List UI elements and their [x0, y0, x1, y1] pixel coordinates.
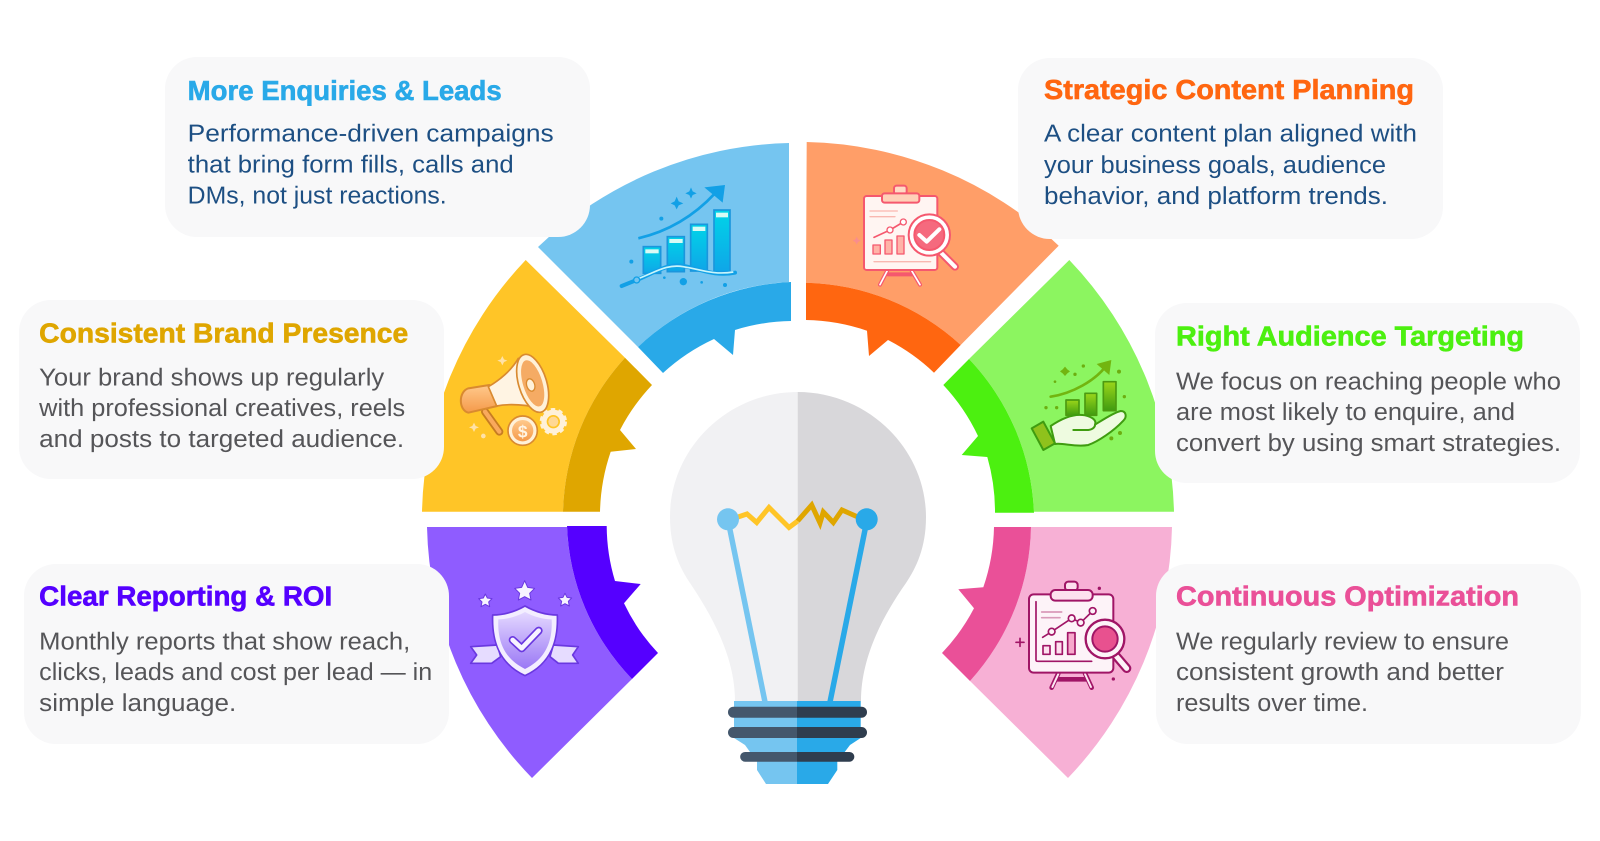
panel: Continuous Optimization [1156, 564, 1581, 744]
base bands [728, 707, 867, 762]
bulb glass [670, 392, 926, 701]
icon: megaphone with coin and gear: $ [518, 422, 528, 441]
body text: convert by using smart strategies. [1176, 430, 1561, 457]
icon: megaphone with coin and gear [461, 351, 565, 445]
body text [1176, 628, 1509, 717]
body text: Your brand shows up regularly [39, 364, 385, 391]
wire contacts [717, 508, 878, 530]
body text [1044, 120, 1417, 210]
heading: Right Audience Targeting [1176, 321, 1524, 352]
body text: Monthly reports that show reach, [39, 628, 410, 655]
body text: simple language. [39, 690, 236, 717]
body text: that bring form fills, calls and [188, 151, 514, 178]
filament [738, 505, 857, 528]
panel: More Enquiries & Leads [165, 57, 590, 237]
panel: Consistent Brand Presence [19, 300, 444, 479]
body text [1176, 368, 1561, 457]
body text: are most likely to enquire, and [1176, 399, 1515, 426]
segment: blue [538, 143, 791, 373]
body text: We regularly review to ensure [1176, 628, 1509, 655]
body text: behavior, and platform trends. [1044, 183, 1388, 210]
body text: consistent growth and better [1176, 659, 1504, 686]
icon: clipboard with magnifier pink [1016, 582, 1127, 688]
body text: We focus on reaching people who [1176, 368, 1561, 395]
light bulb [670, 392, 926, 784]
body text: Performance-driven campaigns [188, 121, 554, 148]
segment: pink [942, 527, 1172, 778]
segment: yellow [422, 260, 652, 512]
icon: hand holding growth chart [1032, 360, 1126, 450]
body text: results over time. [1176, 690, 1368, 717]
support wires [729, 525, 866, 702]
segment: purple [427, 526, 658, 778]
panel: Strategic Content Planning [1018, 58, 1443, 239]
heading: Clear Reporting & ROI [39, 581, 332, 612]
heading: Continuous Optimization [1176, 581, 1519, 612]
bulb base [734, 701, 861, 784]
heading: More Enquiries & Leads [188, 75, 502, 106]
body text: clicks, leads and cost per lead — in [39, 659, 432, 686]
segment: green [943, 260, 1174, 513]
icon: rising bar chart [622, 185, 735, 287]
heading: Strategic Content Planning [1044, 74, 1414, 105]
segment: orange [806, 142, 1059, 373]
heading: Consistent Brand Presence [39, 317, 408, 348]
panel: Clear Reporting & ROI [24, 564, 449, 744]
body text [39, 628, 432, 717]
body text: and posts to targeted audience. [39, 426, 404, 453]
body text: A clear content plan aligned with [1044, 120, 1417, 148]
body text [188, 121, 554, 209]
body text: DMs, not just reactions. [188, 182, 447, 209]
body text [38, 364, 405, 453]
icon: clipboard with magnifier orange [853, 186, 955, 285]
body text: with professional creatives, reels [38, 395, 405, 422]
icon: shield with check and stars [471, 581, 578, 676]
body text: your business goals, audience [1044, 152, 1386, 179]
panel: Right Audience Targeting [1155, 303, 1580, 483]
